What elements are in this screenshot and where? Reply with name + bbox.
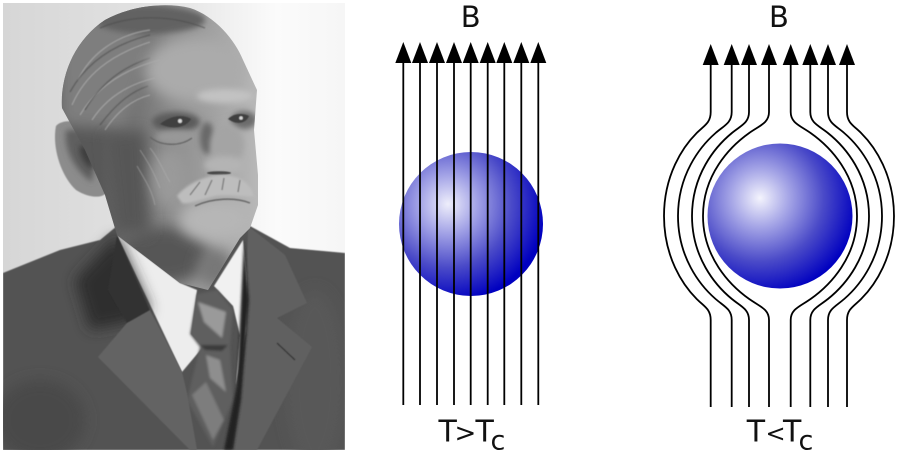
eye sockets: [152, 112, 200, 132]
label: B: B: [769, 0, 789, 34]
left lapel: [98, 310, 197, 450]
shirt collar: [117, 235, 247, 385]
field lines with arrows: [395, 42, 546, 405]
label: T<Tc: T: [746, 415, 766, 450]
nose: [200, 122, 214, 154]
ear: [55, 121, 106, 197]
right lapel: [233, 226, 312, 450]
sphere: [399, 152, 543, 296]
suit jacket: [0, 226, 345, 454]
cheek and jaw shading: [105, 130, 150, 235]
cheek wrinkles: [136, 148, 162, 205]
label: T<Tc: <: [766, 420, 786, 448]
label: B: B: [461, 0, 481, 34]
forehead: [140, 35, 216, 104]
eyes: [150, 114, 249, 144]
sphere: [708, 144, 852, 288]
label: T>Tc: T: [474, 415, 494, 450]
hair: [55, 0, 205, 130]
diagram: normal state T>Tc: [395, 0, 546, 454]
neck: [120, 227, 210, 283]
field lines with arrows: [664, 44, 894, 407]
label: T<Tc: T: [782, 415, 802, 450]
mustache: [177, 175, 254, 206]
label: T>Tc: T: [438, 415, 458, 450]
head and neck: [62, 5, 258, 290]
label: T>Tc: >: [454, 419, 476, 449]
necktie: [187, 290, 233, 447]
portrait photograph: [0, 0, 345, 454]
diagram: superconducting state T<Tc: [664, 0, 894, 454]
jacket collar left (dark): [75, 235, 150, 330]
